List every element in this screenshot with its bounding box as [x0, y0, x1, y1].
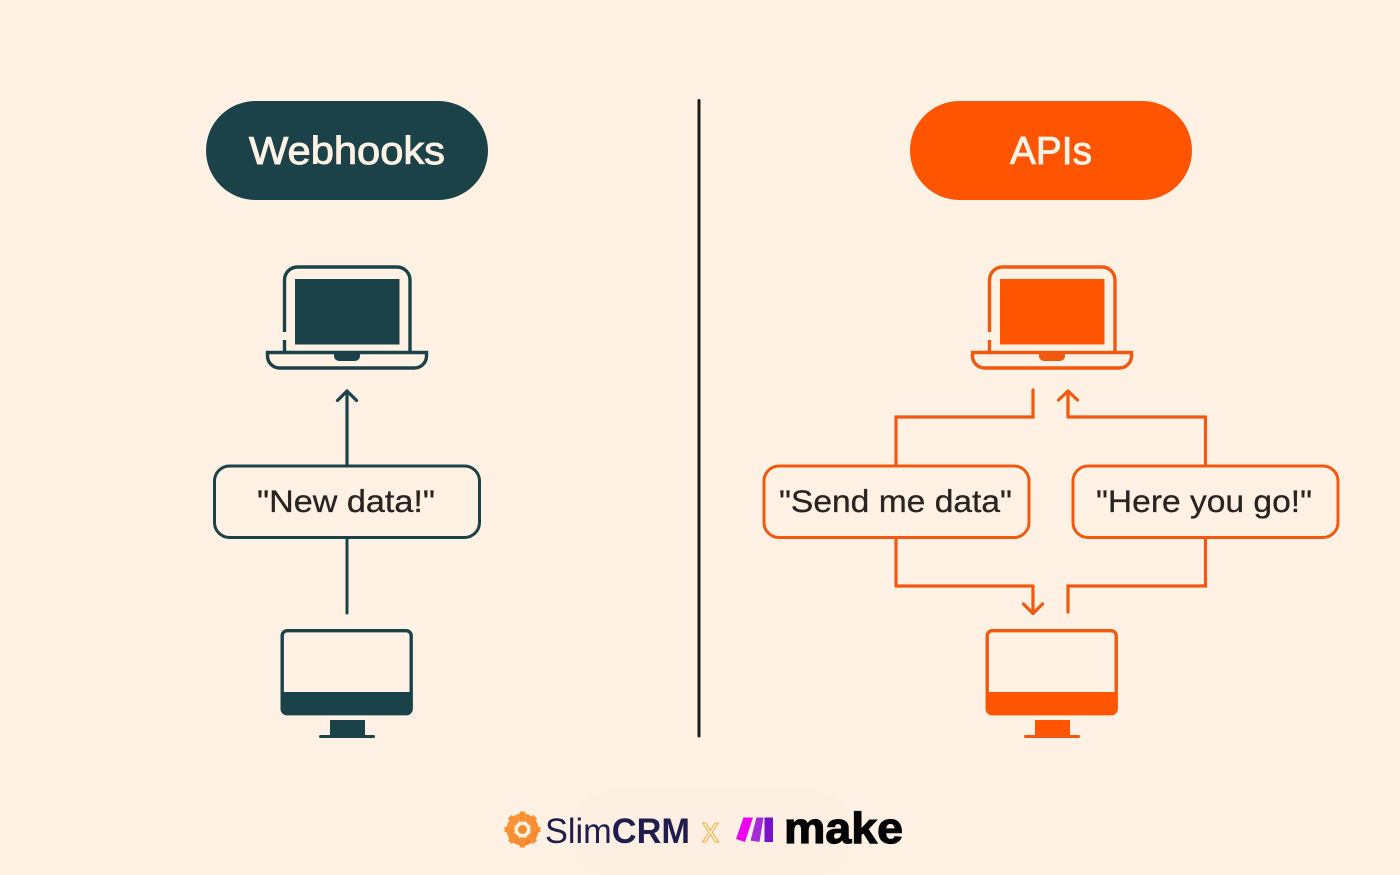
- arrow: request down to desktop: [896, 538, 1042, 614]
- heading: Webhooks: Webhooks: [249, 130, 445, 173]
- vertical divider: [698, 100, 700, 736]
- callout: send me data: "Send me data": [779, 483, 1012, 519]
- footer logos: [504, 804, 903, 853]
- arrow: response line from desktop: [1068, 538, 1206, 612]
- heading: APIs: APIs: [1010, 130, 1092, 173]
- icon: desktop: [281, 631, 412, 738]
- logo text: SlimCRM: SlimCRM: [545, 812, 690, 851]
- icon: laptop: [268, 267, 426, 368]
- line: desktop to callout: [346, 538, 348, 613]
- arrow: request line to laptop: [896, 390, 1033, 466]
- callout: here you go: "Here you go!": [1096, 483, 1312, 519]
- text: x separator: x: [702, 809, 719, 850]
- icon: desktop: [986, 631, 1118, 738]
- logo text: make: make: [784, 804, 903, 853]
- panel: webhooks: [206, 101, 488, 738]
- icon: make logo: [736, 818, 773, 842]
- icon: gear: [504, 812, 540, 848]
- panel: apis: [764, 101, 1338, 738]
- callout: new data: "New data!": [257, 483, 435, 519]
- heading: Webhooks: [206, 101, 488, 200]
- callout: new data: [214, 466, 480, 538]
- heading: APIs: [910, 101, 1192, 200]
- callout: send me data: [764, 466, 1029, 538]
- callout: here you go: [1073, 466, 1338, 538]
- icon: laptop: [972, 267, 1132, 368]
- arrow: up to laptop: [338, 391, 356, 466]
- arrow: response up to laptop: [1058, 391, 1206, 466]
